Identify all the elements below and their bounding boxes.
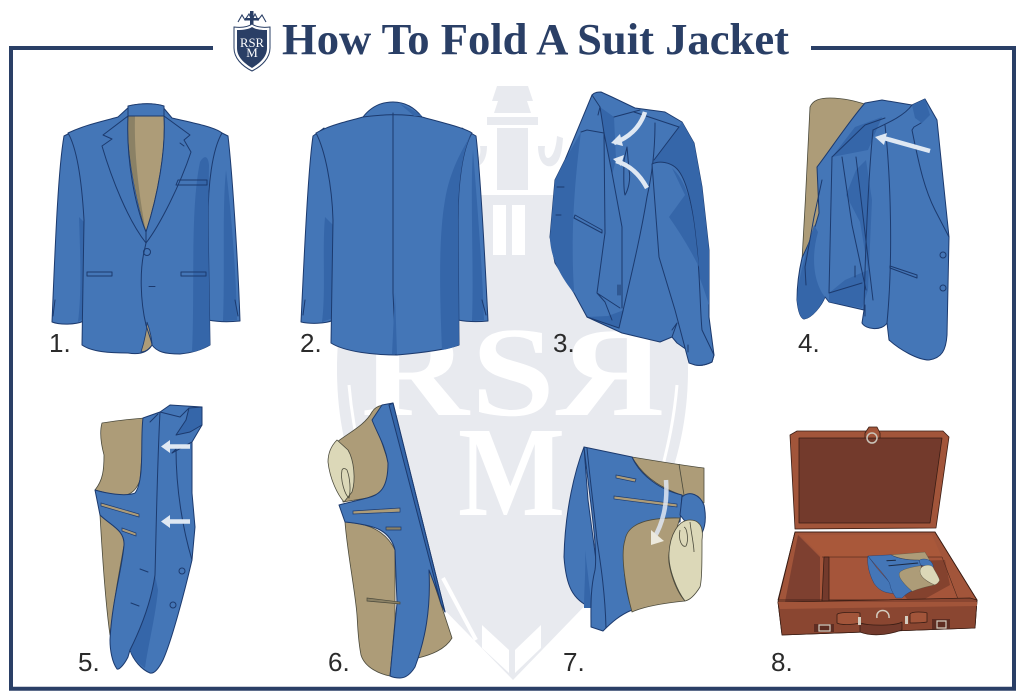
step 3 number: 3.: [553, 328, 575, 358]
step 4: sleeve and side folded: [797, 98, 949, 360]
step 7: bottom folded up: [564, 447, 705, 631]
mini folded jacket: [859, 547, 948, 601]
background watermark: RSM shield crest: [337, 86, 688, 680]
background watermark: RSM shield crest: S: [471, 301, 555, 443]
step 6 number: 6.: [328, 647, 350, 677]
logo: RSM crest: [234, 11, 270, 71]
step 1: jacket front: [52, 104, 240, 354]
step 2: jacket back: [301, 102, 488, 355]
background watermark: RSM shield crest: R: [555, 301, 665, 443]
step 6: half-fold flipped, lining showing: [328, 403, 452, 678]
step 7 number: 7.: [563, 647, 585, 677]
background watermark: RSM shield crest: R: [361, 301, 471, 443]
step 8: jacket in open suitcase: [778, 427, 977, 635]
step 5: jacket folded in half: [95, 405, 202, 673]
step 3: first shoulder tucked: [550, 92, 714, 365]
step 4 number: 4.: [798, 328, 820, 358]
title: How To Fold A Suit Jacket: [282, 15, 789, 64]
step 1 number: 1.: [49, 328, 71, 358]
logo: RSM crest: M: [246, 45, 258, 60]
step 5 number: 5.: [78, 647, 100, 677]
step 8 number: 8.: [771, 647, 793, 677]
background watermark: RSM shield crest: M: [458, 401, 565, 543]
step 2 number: 2.: [300, 328, 322, 358]
logo: RSM crest: RSR: [240, 35, 264, 50]
